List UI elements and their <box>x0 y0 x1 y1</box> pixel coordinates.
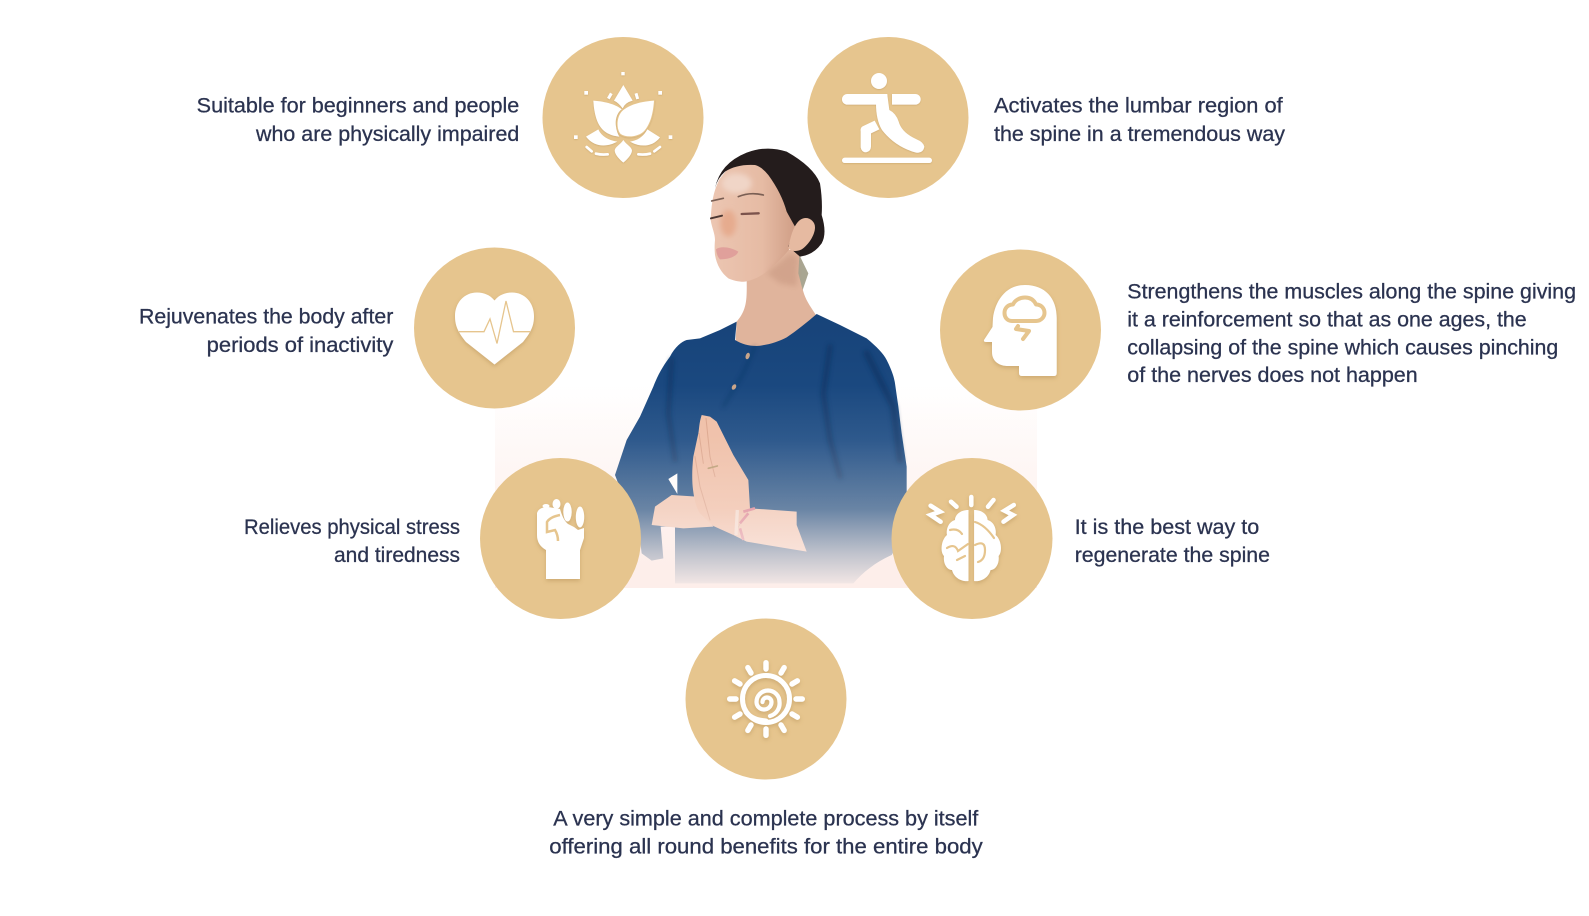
icon: brain with sparks <box>931 497 1014 581</box>
left forearm <box>652 495 713 528</box>
text: beginners: Suitable for beginners and people <box>197 94 519 118</box>
circle badge: warrior pose <box>808 37 968 198</box>
shirt folds <box>668 347 900 477</box>
lips <box>716 247 738 259</box>
icon: spiral sun <box>730 663 802 735</box>
text: rejuvenates: periods of inactivity <box>207 333 394 357</box>
photo: meditating woman in blue shirt <box>615 149 907 583</box>
benefit: warrior pose <box>808 37 1285 198</box>
circle badge: lotus <box>542 37 704 198</box>
circle badge: fist <box>480 458 641 619</box>
benefit: sun <box>549 618 983 859</box>
circle badge: head <box>940 250 1101 410</box>
text: regenerate: regenerate the spine <box>1075 543 1270 567</box>
text: beginners <box>197 94 519 146</box>
text: strengthens: collapsing of the spine which causes pinching <box>1127 335 1558 359</box>
text: regenerate: It is the best way to <box>1075 515 1259 539</box>
icon: lotus <box>574 72 672 163</box>
circle badge: sun <box>686 618 846 780</box>
text: relieves <box>244 515 460 567</box>
text: regenerate <box>1075 515 1270 567</box>
right forearm <box>733 508 807 552</box>
icon: head with storm cloud <box>984 285 1057 376</box>
text: strengthens <box>1127 279 1576 387</box>
benefit: head with cloud <box>940 250 1576 410</box>
eyebrows and eyes <box>711 194 763 218</box>
arm gap <box>668 473 677 494</box>
text: lumbar: Activates the lumbar region of <box>994 94 1283 118</box>
pale gradient panel behind the figure <box>495 385 1037 588</box>
benefit: brain <box>892 458 1270 619</box>
circle badge: heart <box>414 248 575 408</box>
circle badge: brain <box>892 458 1052 619</box>
jaw shadow <box>767 253 798 287</box>
text: beginners: who are physically impaired <box>255 122 519 146</box>
text: complete process <box>549 807 983 859</box>
benefit: lotus <box>197 37 703 198</box>
text: strengthens: Strengthens the muscles along the spine giving <box>1127 279 1576 303</box>
benefit: fist <box>244 458 641 619</box>
icon: warrior yoga pose <box>842 73 932 163</box>
text: lumbar: the spine in a tremendous way <box>994 122 1285 146</box>
forehead highlight <box>722 173 752 193</box>
text: relieves: and tiredness <box>334 543 460 567</box>
hair <box>715 149 824 257</box>
icon: heart with pulse <box>455 292 534 364</box>
icon: raised fist <box>537 499 584 579</box>
buttons <box>745 352 751 360</box>
loose hair strand <box>798 255 808 290</box>
shirt <box>615 314 907 583</box>
text: strengthens: of the nerves does not happen <box>1127 363 1418 387</box>
neck <box>735 250 816 353</box>
text: rejuvenates: Rejuvenates the body after <box>139 305 393 329</box>
soft fade over the lower figure <box>495 385 1037 588</box>
benefit: heart <box>139 248 575 408</box>
text: complete process: A very simple and complete process by itself <box>553 807 978 831</box>
text: complete process: offering all round benefits for the entire body <box>549 835 983 859</box>
ear <box>788 218 815 251</box>
text: relieves: Relieves physical stress <box>244 515 460 539</box>
text: rejuvenates <box>139 305 394 357</box>
face <box>711 160 797 282</box>
text: lumbar <box>994 94 1285 146</box>
praying hands <box>692 415 750 535</box>
bracelet <box>740 508 755 540</box>
nose shading <box>720 210 736 237</box>
text: strengthens: it a reinforcement so that as one ages, the <box>1127 307 1527 331</box>
